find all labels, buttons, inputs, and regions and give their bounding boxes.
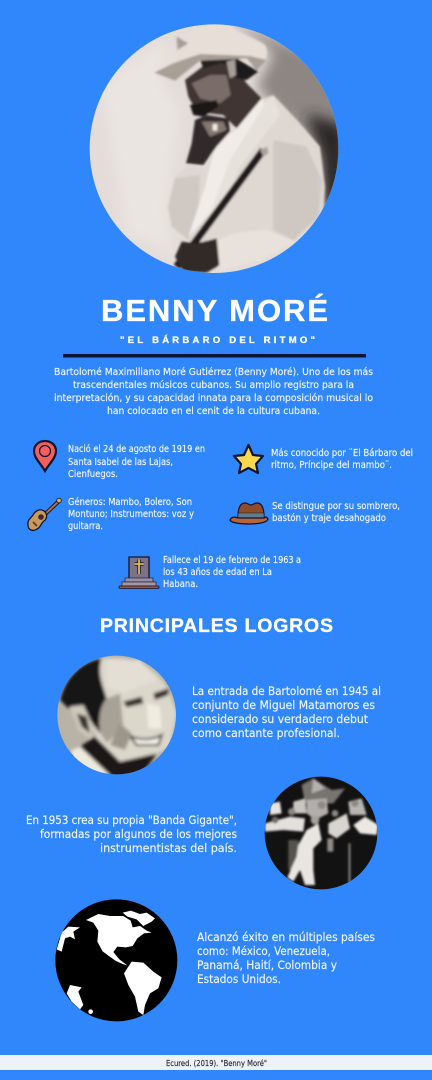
photo: Banda Gigante on stage	[263, 775, 380, 892]
achievement text 1: como cantante profesional.	[192, 726, 340, 740]
achievement text 3: Alcanzó éxito en múltiples países	[197, 930, 375, 944]
divider line	[63, 354, 366, 358]
nickname text	[271, 448, 413, 471]
footer band	[0, 1055, 432, 1070]
achievement text 1: conjunto de Miguel Matamoros es	[192, 698, 375, 712]
icon: map pin	[34, 441, 56, 471]
title: BENNY MORÉ	[101, 293, 328, 328]
achievement text 1	[192, 684, 381, 740]
achievement text 2: instrumentistas del país.	[100, 841, 237, 855]
death text	[163, 555, 301, 590]
subtitle: "EL BÁRBARO DEL RITMO"	[120, 335, 315, 346]
icon: tombstone	[119, 557, 159, 588]
birth text: Santa Isabel de las Lajas,	[68, 457, 173, 468]
hat text	[272, 501, 400, 524]
achievement text 3: Panamá, Haití, Colombia y	[197, 958, 337, 972]
genres text: Géneros: Mambo, Bolero, Son	[68, 497, 192, 508]
icon: guitar	[28, 498, 61, 530]
achievement text 1: La entrada de Bartolomé en 1945 al	[192, 684, 381, 698]
south america	[124, 962, 162, 1015]
achievement text 2: formadas por algunos de los mejores	[40, 827, 237, 841]
birth text	[68, 444, 205, 480]
globe	[55, 899, 177, 1021]
portrait photo: smiling Benny Moré	[57, 656, 176, 774]
section heading: PRINCIPALES LOGROS	[100, 615, 333, 637]
icon: star	[234, 445, 263, 473]
achievement text 1: considerado su verdadero debut	[192, 712, 368, 726]
achievement text 2	[26, 813, 237, 855]
achievement text 3: como: México, Venezuela,	[197, 944, 330, 958]
intro paragraph: trascendentales músicos cubanos. Su amplio registro para la	[73, 379, 354, 391]
north america	[86, 914, 152, 965]
intro paragraph: interpretación, y su capacidad innata para la composición musical lo	[54, 392, 373, 404]
death text: los 43 años de edad en La	[163, 567, 272, 578]
citation: Ecured. (2019). "Benny Moré"	[166, 1058, 267, 1068]
hat text: Se distingue por su sombrero,	[272, 501, 400, 512]
achievement text 3	[197, 930, 375, 986]
nickname text: ritmo, Príncipe del mambo¨.	[271, 460, 392, 471]
achievement text 2: En 1953 crea su propia "Banda Gigante",	[26, 813, 237, 827]
icon: brown hat	[230, 503, 268, 524]
genres text: Montuno; Instrumentos: voz y	[68, 509, 194, 520]
intro paragraph: Bartolomé Maximiliano Moré Gutiérrez (Benny Moré). Uno de los más	[54, 366, 373, 378]
genres text: guitarra.	[68, 521, 103, 532]
death text: Fallece el 19 de febrero de 1963 a	[163, 555, 301, 566]
australia fragment	[67, 985, 83, 1009]
asia fragment	[57, 927, 80, 952]
genres text	[68, 497, 194, 532]
intro paragraph	[54, 366, 373, 417]
death text: Habana.	[163, 579, 198, 590]
intro paragraph: han colocado en el cenit de la cultura cubana.	[107, 406, 320, 417]
arctic islands	[123, 911, 155, 926]
birth text: Nació el 24 de agosto de 1919 en	[68, 444, 205, 455]
nickname text: Más conocido por ¨El Bárbaro del	[271, 448, 413, 459]
birth text: Cienfuegos.	[68, 469, 118, 480]
hat text: bastón y traje desahogado	[272, 513, 386, 524]
achievement text 3: Estados Unidos.	[197, 972, 281, 986]
portrait photo: Benny Moré in hat	[87, 20, 347, 277]
